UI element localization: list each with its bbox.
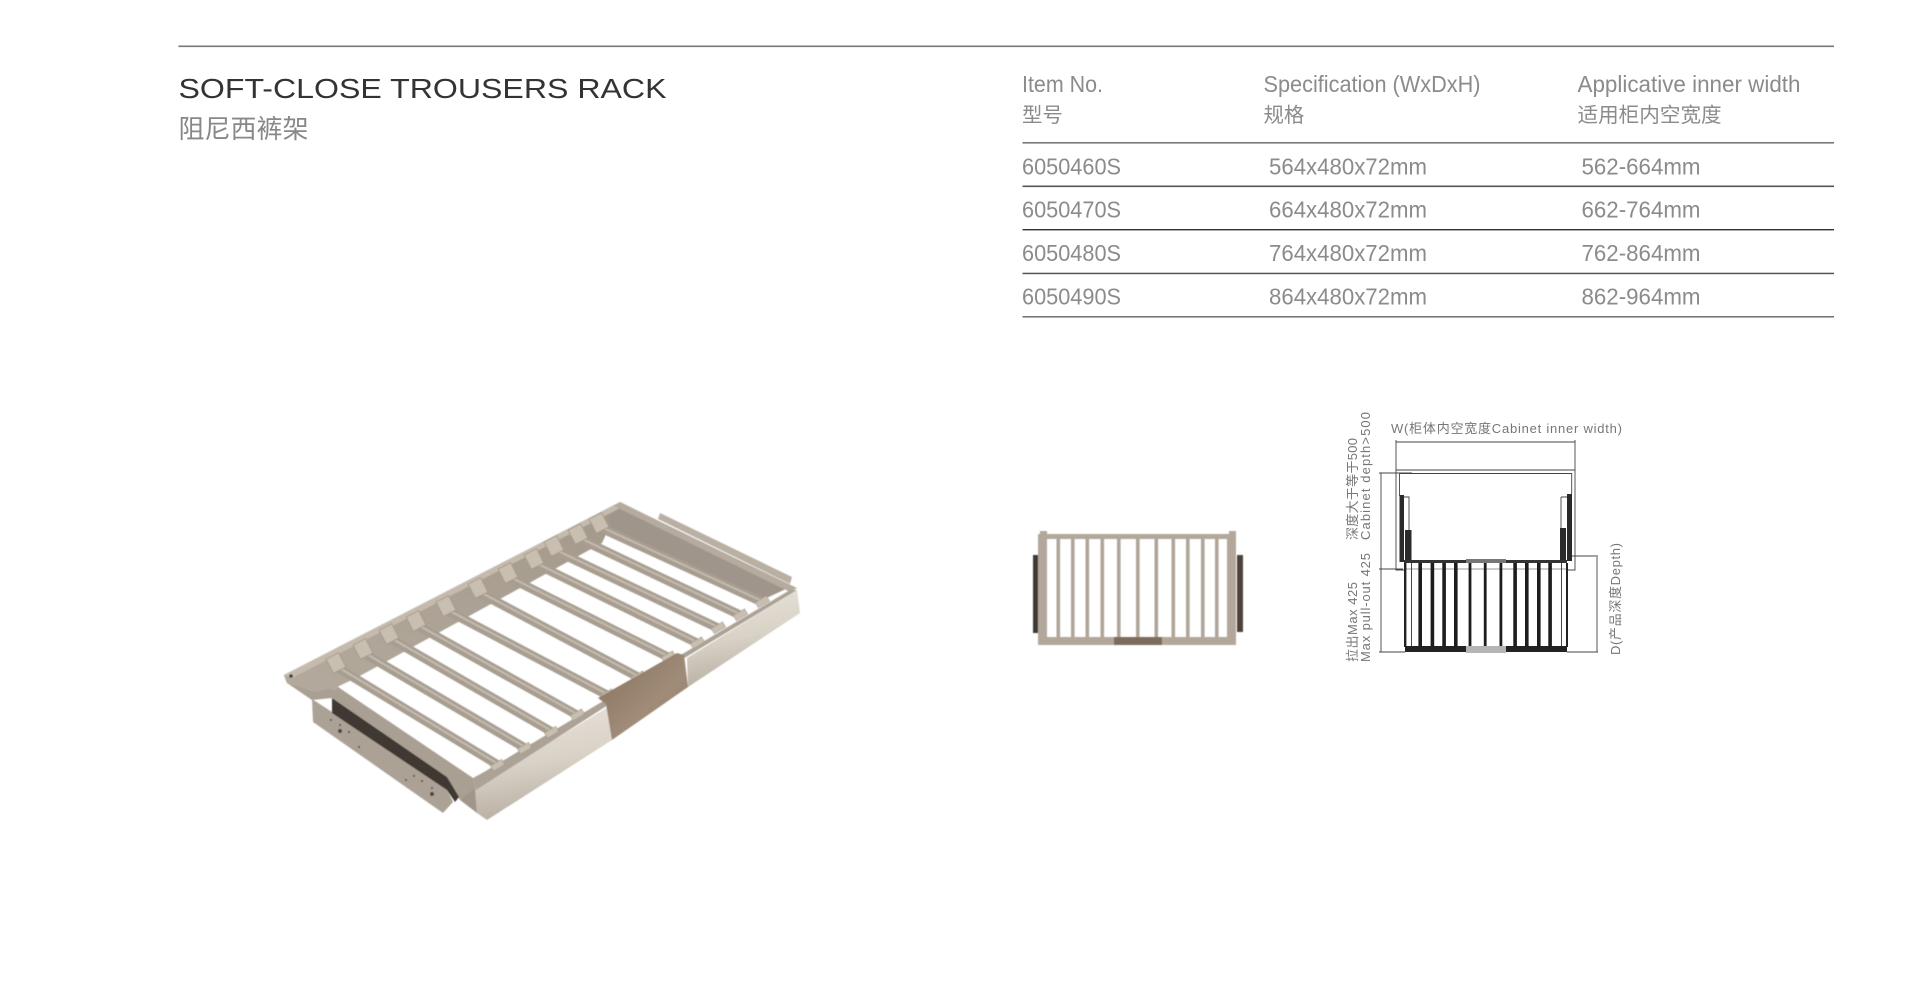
- table row 6050460S: 6050460S: [1022, 154, 1121, 180]
- product top view: [1033, 531, 1243, 645]
- dimension labels: W(柜体内空宽度Cabinet inner width): [1391, 421, 1622, 436]
- product photo: trousers rack perspective view: [284, 502, 800, 820]
- title: [178, 73, 667, 144]
- table row 6050490S: 862-964mm: [1582, 284, 1700, 310]
- bars: [1056, 538, 1219, 638]
- hanging bars: [338, 528, 762, 765]
- table row 6050490S: 864x480x72mm: [1269, 284, 1427, 310]
- title: 阻尼西裤架: [178, 114, 309, 144]
- installation dimension diagram: [1345, 412, 1623, 662]
- front tabs: [490, 596, 770, 771]
- side runners: [1033, 555, 1039, 633]
- dimension labels: 深度大于等于500: [1345, 438, 1360, 540]
- back tabs: [326, 513, 609, 673]
- table row 6050470S: 664x480x72mm: [1269, 196, 1427, 222]
- back rail: [284, 502, 640, 692]
- table header: Applicative inner width: [1578, 71, 1800, 97]
- table row 6050460S: [1022, 154, 1700, 180]
- front rail: [475, 707, 612, 820]
- table row 6050460S: 564x480x72mm: [1269, 154, 1427, 180]
- pull-out drawer: [1404, 559, 1568, 653]
- table header: 型号: [1022, 104, 1063, 127]
- handle: [1114, 637, 1162, 645]
- table row 6050470S: 6050470S: [1022, 196, 1121, 222]
- dimension labels: Max pull-out 425: [1358, 553, 1373, 662]
- table row 6050480S: 762-864mm: [1582, 240, 1700, 266]
- table header: Specification (WxDxH): [1264, 71, 1480, 97]
- table header: 适用柜内空宽度: [1578, 104, 1722, 127]
- table header: 规格: [1264, 104, 1304, 127]
- cabinet outline and dimension lines: [1379, 440, 1598, 652]
- rear flange: [658, 513, 792, 584]
- table row 6050490S: 6050490S: [1022, 284, 1121, 310]
- left runner slot: [332, 698, 459, 802]
- dimension labels: 拉出Max 425: [1345, 582, 1360, 662]
- table row 6050460S: 562-664mm: [1582, 154, 1700, 180]
- table row 6050480S: 764x480x72mm: [1269, 240, 1427, 266]
- runners: [1400, 494, 1572, 562]
- table row 6050480S: [1022, 240, 1700, 266]
- dimension labels: [1345, 412, 1623, 662]
- table row 6050470S: [1022, 196, 1700, 222]
- table row 6050480S: 6050480S: [1022, 240, 1121, 266]
- rear pocket: [608, 508, 790, 602]
- table row 6050490S: [1022, 284, 1700, 310]
- specification table: [1022, 71, 1834, 318]
- mounting holes: [330, 719, 434, 796]
- frame: [1038, 531, 1236, 645]
- table header: [1022, 71, 1800, 127]
- title: SOFT-CLOSE TROUSERS RACK: [178, 73, 667, 104]
- table header: Item No.: [1022, 71, 1103, 97]
- dimension labels: Cabinet depth>500: [1358, 412, 1373, 540]
- left mounting plate: [312, 699, 453, 813]
- handle bracket: [598, 653, 688, 740]
- table row 6050470S: 662-764mm: [1582, 196, 1700, 222]
- dimension labels: D(产品深度Depth): [1608, 543, 1623, 655]
- left side rail: [284, 668, 476, 800]
